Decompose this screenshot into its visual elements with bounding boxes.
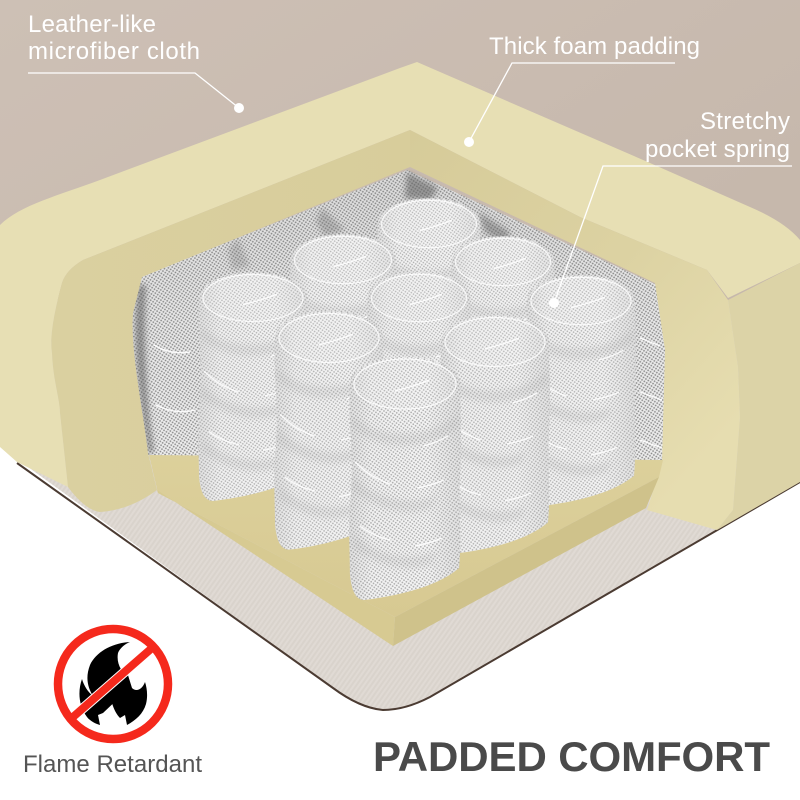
callout: leather-like microfiber cloth [28, 11, 244, 113]
callout: thick foam padding: Thick foam padding [489, 33, 700, 60]
panel: foam base slab [149, 455, 663, 646]
callout: stretchy pocket spring: pocket spring [645, 136, 790, 163]
spring: back centre [377, 198, 481, 429]
spring: third row centre [367, 272, 471, 503]
title: PADDED COMFORT [373, 733, 770, 780]
panel: woven base fabric [0, 300, 800, 710]
panel: foam top band [0, 62, 800, 487]
callout: stretchy pocket spring: Stretchy [700, 108, 790, 135]
label: flame retardant: Flame Retardant [23, 751, 202, 778]
spring: fourth row right [440, 316, 550, 554]
callout: stretchy pocket spring [549, 108, 792, 308]
spring: second row right [451, 236, 555, 467]
panel: foam right inner wall and cut face [410, 130, 740, 530]
panel: foam right outer side [717, 263, 800, 530]
spring: second row left [290, 234, 396, 465]
panel: leather-like taupe cover [0, 0, 800, 300]
spring: third row right [526, 275, 636, 506]
callout: thick foam padding [464, 33, 700, 147]
icon: flame retardant [58, 629, 168, 739]
spring: third row left [198, 273, 308, 501]
callout: leather-like microfiber cloth: Leather-like [28, 11, 156, 38]
panel: back row of pocket springs [133, 170, 668, 462]
spring: fourth row left [274, 312, 384, 550]
callout: leather-like microfiber cloth: microfiber cloth [28, 38, 200, 65]
spring: front centre [349, 357, 461, 600]
panel: foam left inner wall [51, 130, 410, 512]
